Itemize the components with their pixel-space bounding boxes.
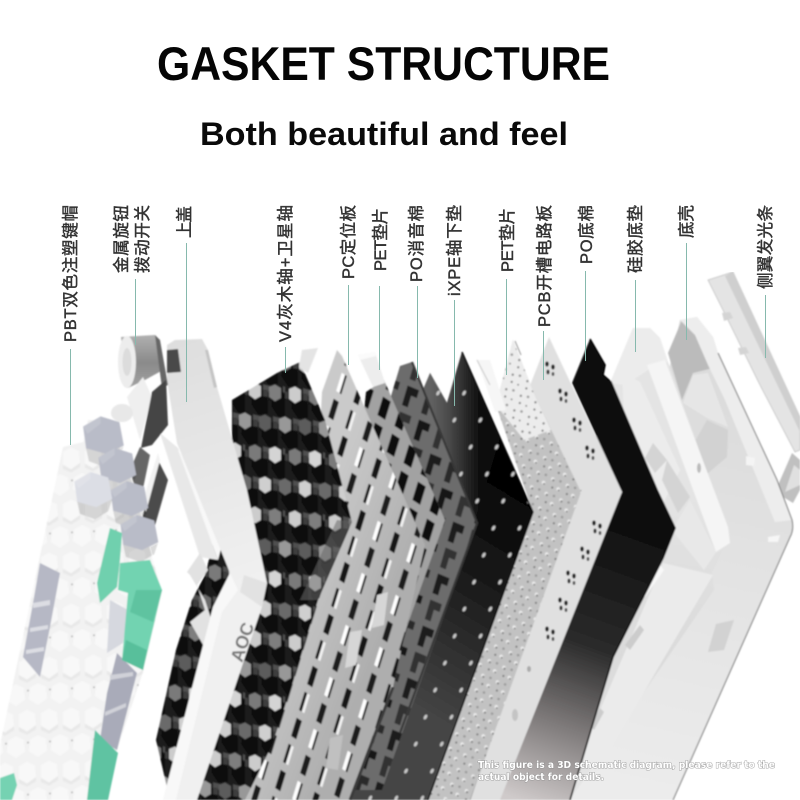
metal knob toggle xyxy=(111,335,168,448)
iXPE under-switch pad xyxy=(330,352,533,800)
label: metal knob toggle xyxy=(112,205,152,345)
PET pad, lower tab and sheet xyxy=(340,352,445,660)
subtitle: Both beautiful and feel xyxy=(200,116,568,152)
PCB slotted circuit board xyxy=(470,337,622,800)
PO bottom foam xyxy=(490,339,675,800)
label: PBT keycaps: PBT双色注塑键帽 xyxy=(61,205,80,342)
bottom case xyxy=(520,317,793,800)
label: PC plate: PC定位板 xyxy=(339,205,358,279)
label: metal knob toggle: 拨动开关 xyxy=(133,205,152,273)
label: PO bottom foam: PO底棉 xyxy=(577,205,596,264)
main frame xyxy=(163,339,267,800)
PO sound foam xyxy=(330,362,477,790)
side wing light bar xyxy=(708,272,800,510)
V4 switches and stabilizers xyxy=(156,348,352,800)
disclaimer: This figure is a 3D schematic diagram, please refer to the xyxy=(478,760,775,771)
label: top cover: 上盖 xyxy=(175,206,194,238)
grey keycap strips xyxy=(23,563,60,677)
keyboard exploded view xyxy=(0,272,800,800)
label: bottom case xyxy=(677,205,696,340)
inner rim xyxy=(160,433,218,560)
label: PET pad: PET垫片 xyxy=(371,208,390,271)
silicone bottom pad xyxy=(500,328,730,800)
label: bottom case: 底壳 xyxy=(677,205,696,238)
label: PCB: PCB开槽电路板 xyxy=(535,205,554,327)
top cover xyxy=(130,339,267,800)
label: PO sound foam: PO消音棉 xyxy=(407,205,426,282)
mint keycaps xyxy=(0,528,162,800)
grey keycaps top xyxy=(74,416,158,562)
PC plate xyxy=(220,350,425,800)
label: side wing light: 侧翼发光条 xyxy=(756,205,775,289)
PBT keycaps xyxy=(0,416,162,800)
AOC logo: AOC xyxy=(227,620,258,664)
label: silicone pad: 硅胶底垫 xyxy=(626,204,645,273)
white tab xyxy=(358,352,385,387)
title: GASKET STRUCTURE xyxy=(157,38,610,91)
label: PET pad 2: PET垫片 xyxy=(498,208,517,272)
label: switches: V4灰木轴+卫星轴 xyxy=(276,205,295,342)
dark inner bars xyxy=(130,447,150,503)
label: metal knob toggle: 金属旋钮 xyxy=(112,205,131,273)
label: iXPE pad: iXPE轴下垫 xyxy=(445,204,464,296)
disclaimer: actual object for details. xyxy=(478,772,604,783)
PET pad, speckled xyxy=(425,340,581,800)
disclaimer xyxy=(478,760,775,783)
